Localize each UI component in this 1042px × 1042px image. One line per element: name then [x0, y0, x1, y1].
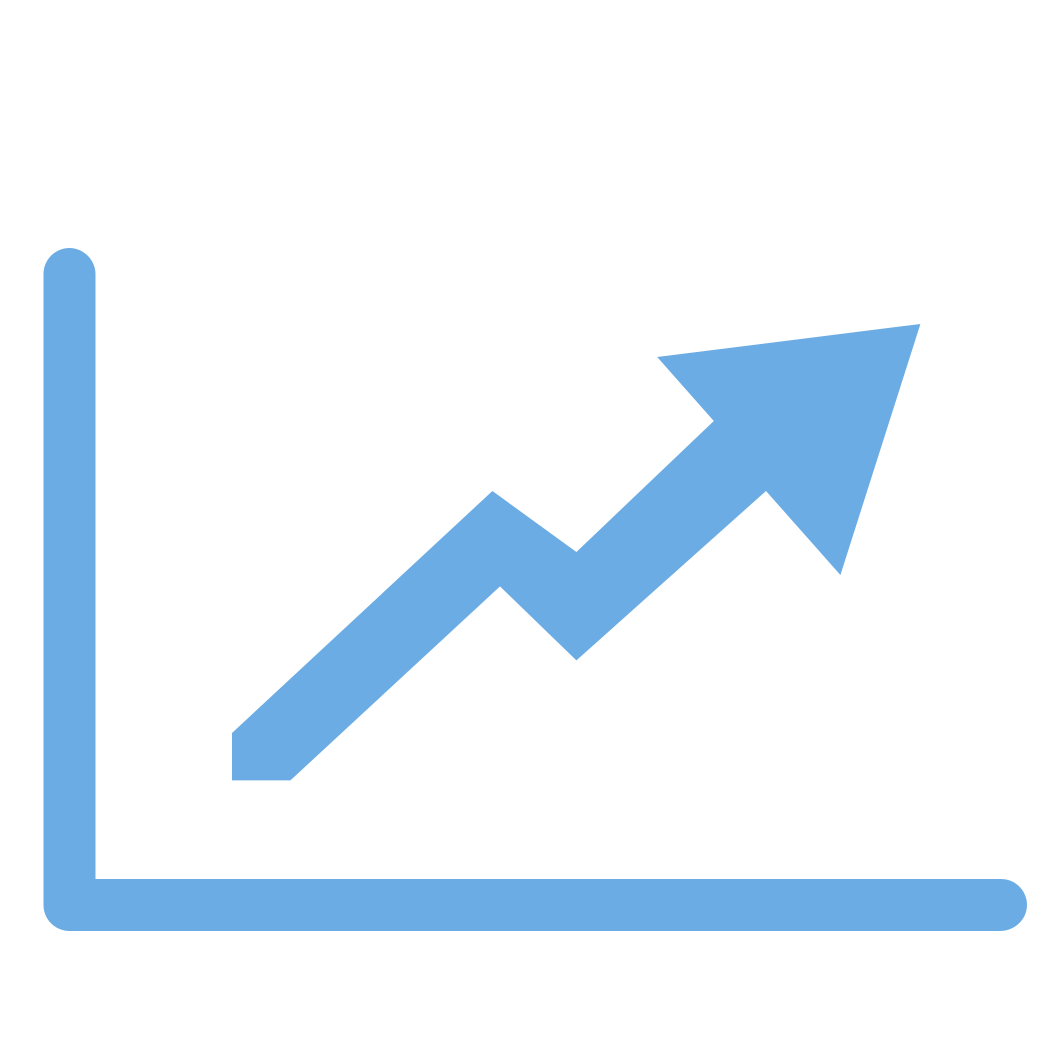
chart axes: [44, 248, 1027, 931]
rising arrow: [232, 324, 920, 780]
